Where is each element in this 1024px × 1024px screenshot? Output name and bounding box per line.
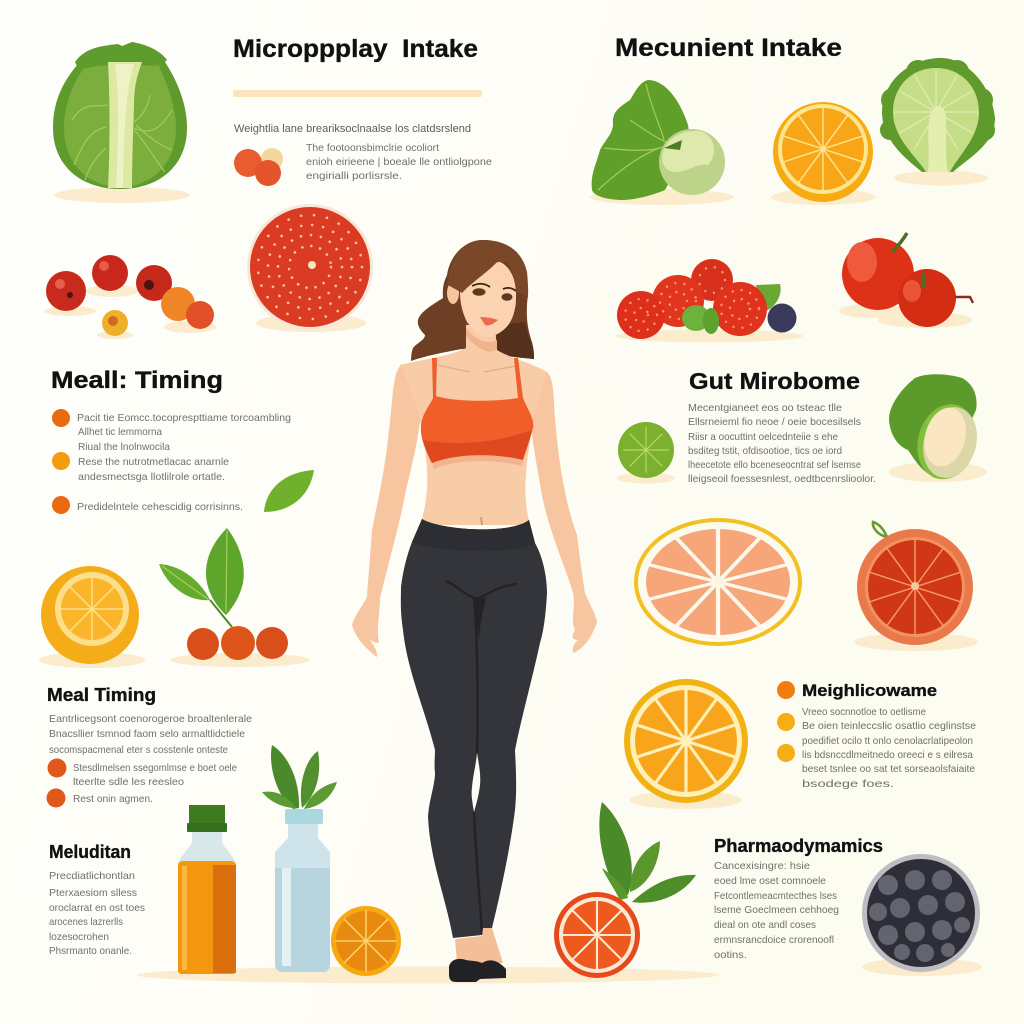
bra shadow on skin <box>432 455 523 469</box>
icon: grapefruit oval <box>634 518 802 646</box>
text block: meluditan: lozesocrohen <box>49 931 109 943</box>
icon: green leaf <box>264 470 314 512</box>
icon: leaf and green apple <box>590 80 734 205</box>
crop top <box>421 358 533 463</box>
text block: pharmacodynamics: Cancexisingre: hsie <box>714 860 810 872</box>
list: meal timing bullets <box>52 409 291 514</box>
text block: meluditan: Phsrmanto onanle. <box>49 945 132 957</box>
text block: meal timing lower: Rest onin agmen. <box>73 793 153 805</box>
eyes and mouth <box>472 284 516 291</box>
text block: pharmacodynamics: dieal on ote andl coses <box>714 919 816 931</box>
left arm <box>352 364 423 657</box>
text block: meighlicowame: lis bdsnccdlmeitnedo oreeci e s eilresa <box>802 749 973 761</box>
text block: gut microbiome: lleigseoil foessesnlest, oedtbcenrslioolor. <box>688 473 876 485</box>
text block: meal timing lower <box>46 685 252 808</box>
ear <box>447 282 459 304</box>
icon: orange juice bottle <box>178 805 236 974</box>
icon: orange <box>39 566 145 668</box>
text block: meal timing lower: Eantrlicegsont coenorogeroe broaltenlerale <box>49 713 252 725</box>
text block: gut microbiome: Ellsrneieml fio neoe / oeie bocesilsels <box>688 416 861 428</box>
text block: meluditan: oroclarrat en ost toes <box>49 902 145 914</box>
text block: meighlicowame: Meighlicowame <box>802 681 937 700</box>
icon: halved green fruit <box>889 374 987 486</box>
text block: meal timing lower: Meal Timing <box>47 685 156 705</box>
icon: halved green cabbage <box>880 58 995 186</box>
text block: gut microbiome: Gut Mirobome <box>689 368 860 394</box>
text block: pharmacodynamics: ermnsrancdoice crorenoofl <box>714 934 834 946</box>
front hair <box>448 240 528 297</box>
face <box>460 262 516 337</box>
sandals <box>449 959 506 982</box>
text block: pharmacodynamics: Pharmaodymamics <box>714 836 883 856</box>
icon: orange wheel <box>624 679 748 809</box>
text block: pharmacodynamics: eoed lme oset comnoele <box>714 875 826 887</box>
icon: plate of dark berries <box>862 854 982 976</box>
text block: meighlicowame: bsodege foes. <box>802 778 894 790</box>
collarbone <box>437 365 516 372</box>
heading underline bar <box>233 90 482 97</box>
leggings <box>401 519 547 938</box>
text block: gut microbiome: Riisr a oocuttint oelcednteiie s ehe <box>688 431 838 443</box>
ankles <box>455 928 503 963</box>
text block: pharmacodynamics: ootins. <box>714 949 747 961</box>
text block: intake intro: engirialli porlisrsle. <box>306 170 402 182</box>
list: meal timing bullets: Riual the lnolnwocila <box>78 441 170 453</box>
icon: lime slice <box>617 422 675 484</box>
text block: meal timing lower: socomspacmenal eter s cosstenle onteste <box>49 744 228 756</box>
icon: orange half <box>771 102 875 205</box>
ground shadow <box>137 966 719 984</box>
figure: woman <box>352 240 597 982</box>
list: meal timing bullets: Predidelntele cehescidig corrisinns. <box>77 501 243 513</box>
icon: strawberries with blueberry <box>615 259 803 342</box>
icon: scattered berries <box>44 255 216 339</box>
icon: orange slice <box>331 906 401 976</box>
icon: red seeded fruit <box>247 204 373 332</box>
right arm <box>528 371 597 653</box>
navel <box>481 517 482 525</box>
text block: pharmacodynamics <box>714 836 883 961</box>
text block: meighlicowame: beset tsnlee oo sat tet sorseaolsfaiaite <box>802 763 975 775</box>
text block: meighlicowame: Vreeo socnnotloe to oetlisme <box>802 706 926 718</box>
text block: meluditan: Pterxaesiom slless <box>49 887 137 899</box>
text block: meal timing lower: lteerlte sdle les reesleo <box>73 776 184 788</box>
text block: meal timing lower: Bnacsllier tsmnod faom selo armaltlidctiele <box>49 728 245 740</box>
icon: plant with berries <box>159 528 310 667</box>
text block: gut microbiome <box>688 368 876 485</box>
text block: meighlicowame: Be oien teinleccslic osatlio ceglinstse <box>802 720 976 732</box>
text block: meal timing lower: Stesdlmelsen ssegomlmse e boet oele <box>73 762 237 774</box>
text block: meluditan: arocenes lazrerlls <box>49 916 123 928</box>
heading: meal timing: Meall: Timing <box>51 367 223 394</box>
text block: meighlicowame: poedifiet ocilo tt onlo cenolacrlatipeolon <box>802 735 973 747</box>
text block: gut microbiome: lheecetote ello bceneseocntrat sef lsemse <box>688 459 861 471</box>
icon: small red fruits <box>234 148 283 186</box>
text block: intake intro: enioh eirieene | boeale lle ontliolgpone <box>306 156 492 168</box>
list: meal timing bullets: Allhet tic lemmorna <box>78 426 162 438</box>
text block: pharmacodynamics: Fetcontlemeacmtecthes lses <box>714 890 837 902</box>
title: micronutrient intake right: Mecunient Intake <box>615 34 842 62</box>
back hair <box>411 240 534 361</box>
text block: intake intro: The footoonsbimclrie ocoliort <box>306 142 439 154</box>
text block: intake intro: Weightlia lane breariksoclnaalse los clatdsrslend <box>234 123 471 135</box>
text block: meighlicowame <box>777 681 976 790</box>
neck shadow <box>466 328 497 352</box>
icon: green cabbage <box>53 42 190 203</box>
text block: meluditan: Meluditan <box>49 842 131 862</box>
text block: gut microbiome: bsditeg tstit, ofdisootioe, tics oe iord <box>688 445 842 457</box>
text block: intake intro <box>234 123 492 182</box>
text block: gut microbiome: Mecentgianeet eos oo tsteac tlle <box>688 402 842 414</box>
text block: meluditan: Precdiatlichontlan <box>49 870 135 882</box>
text block: pharmacodynamics: lseme Goeclmeen cehhoeg <box>714 904 839 916</box>
list: meal timing bullets: Pacit tie Eomcc.tocoprespttiame torcoambling <box>77 412 291 424</box>
icon: red grapefruit <box>854 522 978 651</box>
list: meal timing bullets: Rese the nutrotmetlacac anarnle <box>78 456 229 468</box>
torso and neck <box>400 325 547 525</box>
title: micronutrient heading: Microppplay Intake <box>233 35 478 63</box>
icon: blood orange with leaves <box>554 802 696 978</box>
icon: red apples <box>839 233 973 328</box>
icon: water bottle with plant <box>262 745 337 972</box>
text block: meluditan <box>49 842 145 957</box>
list: meal timing bullets: andesmectsga llotlilrole ortatle. <box>78 471 225 483</box>
